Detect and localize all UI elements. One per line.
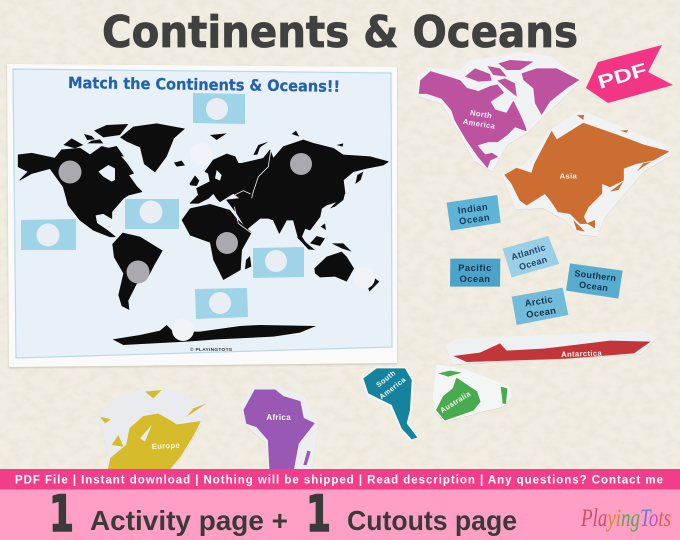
velcro dots [36,98,375,341]
card: Arctic Ocean: Arctic [524,294,554,309]
cutout: Asia [503,112,670,235]
map: Madagascar [245,256,251,269]
cutout: South America: America [377,375,408,401]
title: Continents & Oceans [102,7,578,58]
card: Pacific Ocean [450,259,500,287]
cutout: Africa [242,387,317,470]
card: Atlantic Ocean: Atlantic [510,242,547,262]
world map [18,123,388,345]
map: Africa [182,204,252,280]
map: New Zealand [368,278,379,292]
label: North America: North [469,108,493,120]
cutouts: upper right [418,53,670,363]
cutout: North America: America [462,117,496,131]
card: Indian Ocean: Ocean [459,212,491,226]
map: Australia [314,252,354,282]
panel: activity page poster [7,64,397,367]
card: Southern Ocean [566,263,623,299]
map: Greenland [120,123,185,172]
card: Pacific Ocean: Ocean [459,274,491,284]
pdf tag: PDF [596,60,649,94]
continent border lines [98,151,271,233]
text: activity page: Activity page + [90,505,288,536]
map: Iceland and UK [174,161,199,186]
card: Atlantic Ocean: Ocean [518,254,549,272]
map: Arctic Russia and Japan [210,131,363,208]
card: Pacific Ocean: Pacific [458,263,492,273]
label: Antarctica: Antarctica [561,349,603,359]
pdf tag [586,45,673,103]
logo: Playing Tots: PlayingTots [580,505,671,532]
card: Indian Ocean: Indian [457,202,489,216]
label: Europe: Europe [151,441,180,451]
card: Atlantic Ocean [503,236,559,277]
cutout: Australia [434,366,511,421]
cutout: Antarctica [447,333,654,363]
label: South America: South [374,368,398,389]
card: Arctic Ocean: Ocean [526,305,557,320]
footer band: pink [0,485,680,540]
card: Indian Ocean [447,195,501,231]
map: Antarctica [113,325,316,345]
cutout: North America [418,53,580,170]
map: Arctic islands [63,124,128,157]
card: Southern Ocean: Southern [574,268,617,283]
strip text: PDF File | Instant download | Nothing will be shipped | Read description | Any questions? Contact me [15,474,663,486]
cutout: South America [361,367,419,441]
poster heading: Match the Continents & Oceans!! [68,74,340,96]
cutout: Europe [100,389,207,470]
label: Asia: Asia [560,171,577,180]
label: Africa: Africa [266,413,291,422]
map: Eurasia [190,140,388,249]
cutouts: lower row [100,366,511,470]
card: Southern Ocean: Ocean [579,280,609,293]
text: cutouts page: Cutouts page [347,505,517,536]
map: South America [112,233,163,310]
map: North America [18,147,142,237]
ocean label placeholders [21,93,304,319]
label: Australia: Australia [438,389,473,415]
copyright line: © PLAYINGTOTS [190,346,233,353]
card: Arctic Ocean [512,288,568,325]
footer band: hot pink strip [0,469,680,490]
map: Southeast Asia islands [297,223,352,252]
